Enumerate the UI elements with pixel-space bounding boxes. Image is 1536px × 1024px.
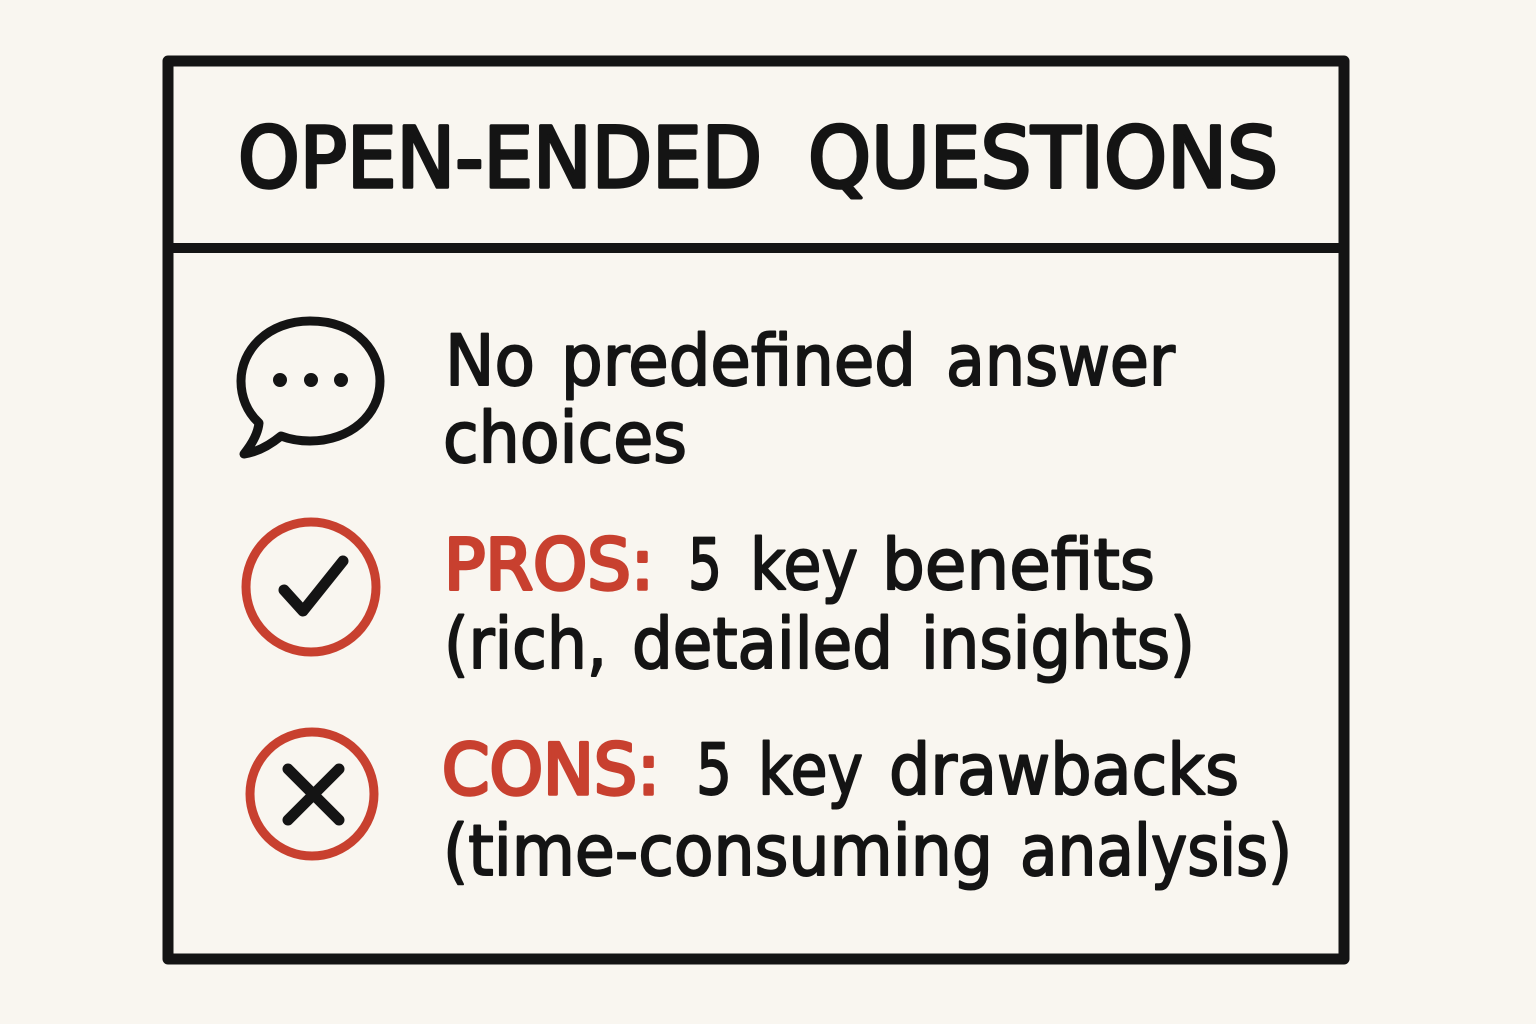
icon: speech bubble	[241, 321, 380, 454]
title	[238, 109, 1278, 207]
text: no predefined answer choices: choices	[443, 397, 687, 479]
text: cons: 5	[696, 729, 732, 811]
text: pros: PROS:	[444, 524, 654, 606]
text: no predefined answer choices: answer	[946, 320, 1175, 402]
title: OPEN-ENDED	[238, 109, 762, 207]
text: no predefined answer choices: No	[445, 320, 535, 402]
text: cons: analysis)	[1020, 810, 1292, 892]
title: QUESTIONS	[808, 109, 1278, 207]
text: no predefined answer choices	[443, 320, 1175, 479]
text: pros: (rich,	[444, 603, 607, 685]
text: cons	[442, 729, 1292, 892]
text: cons: CONS:	[442, 729, 660, 811]
icon: check in red circle	[246, 522, 376, 652]
text: cons: key	[758, 729, 863, 811]
text: pros: benefits	[882, 524, 1155, 606]
text: pros	[444, 524, 1195, 685]
text: pros: detailed	[632, 603, 893, 685]
text: cons: drawbacks	[889, 729, 1239, 811]
text: no predefined answer choices: predefined	[561, 320, 916, 402]
icon: cross in red circle	[250, 732, 374, 856]
panel: open-ended questions card	[168, 61, 1344, 959]
text: cons: (time-consuming	[443, 810, 993, 892]
text: pros: 5	[688, 524, 722, 606]
text: pros: insights)	[921, 603, 1195, 685]
text: pros: key	[750, 524, 858, 606]
